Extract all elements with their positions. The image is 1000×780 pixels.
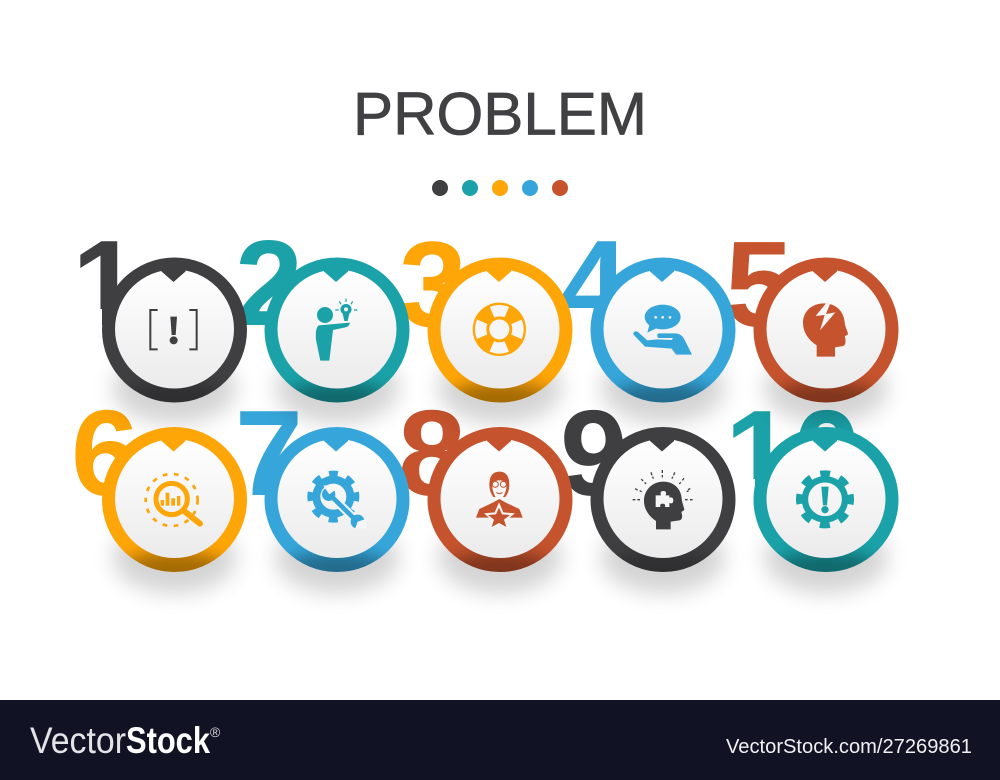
- title: PROBLEM: [353, 80, 647, 148]
- numeral 10: 10: [725, 385, 861, 521]
- footer logo: Stock: [126, 720, 210, 761]
- numeral 2: 2: [235, 215, 303, 351]
- footer logo: Vector: [30, 720, 126, 761]
- badge 7: [264, 427, 410, 594]
- badge 8: [428, 427, 572, 594]
- icon: speech bubble over hand: [633, 305, 692, 355]
- footer bar: [0, 700, 1000, 780]
- numeral 6: 6: [71, 385, 139, 521]
- icon: gear with wrench: [310, 474, 367, 529]
- palette dots: [432, 180, 568, 196]
- footer logo: ®: [210, 724, 221, 740]
- icon: bracketed exclamation mark: [150, 310, 197, 349]
- badge 10: [754, 427, 898, 594]
- footer image id: VectorStock.com/27269861: [726, 736, 972, 758]
- icon: magnifier over bar chart: [146, 474, 200, 526]
- badge 6: [102, 427, 247, 594]
- numeral 1: 1: [72, 215, 140, 351]
- icon: head with puzzle piece and rays: [633, 470, 693, 529]
- badge 1: [102, 258, 247, 424]
- numeral 4: 4: [560, 215, 628, 351]
- badge 4: [590, 258, 736, 424]
- footer logo: [30, 720, 221, 761]
- badge 2: [264, 258, 410, 424]
- badge 3: [428, 258, 572, 424]
- badge 5: [754, 258, 898, 424]
- icon: head with lightning bolt: [803, 303, 848, 357]
- numeral 8: 8: [398, 385, 466, 521]
- icon: person with star: [476, 472, 523, 529]
- icon: gear with exclamation mark: [799, 474, 851, 525]
- icon: lifebuoy: [473, 303, 526, 356]
- numeral 5: 5: [725, 216, 793, 352]
- numeral 7: 7: [235, 385, 303, 521]
- numeral 9: 9: [560, 385, 628, 521]
- numeral 3: 3: [399, 216, 467, 352]
- icon: person with light bulb: [316, 299, 357, 361]
- badge 9: [590, 427, 736, 594]
